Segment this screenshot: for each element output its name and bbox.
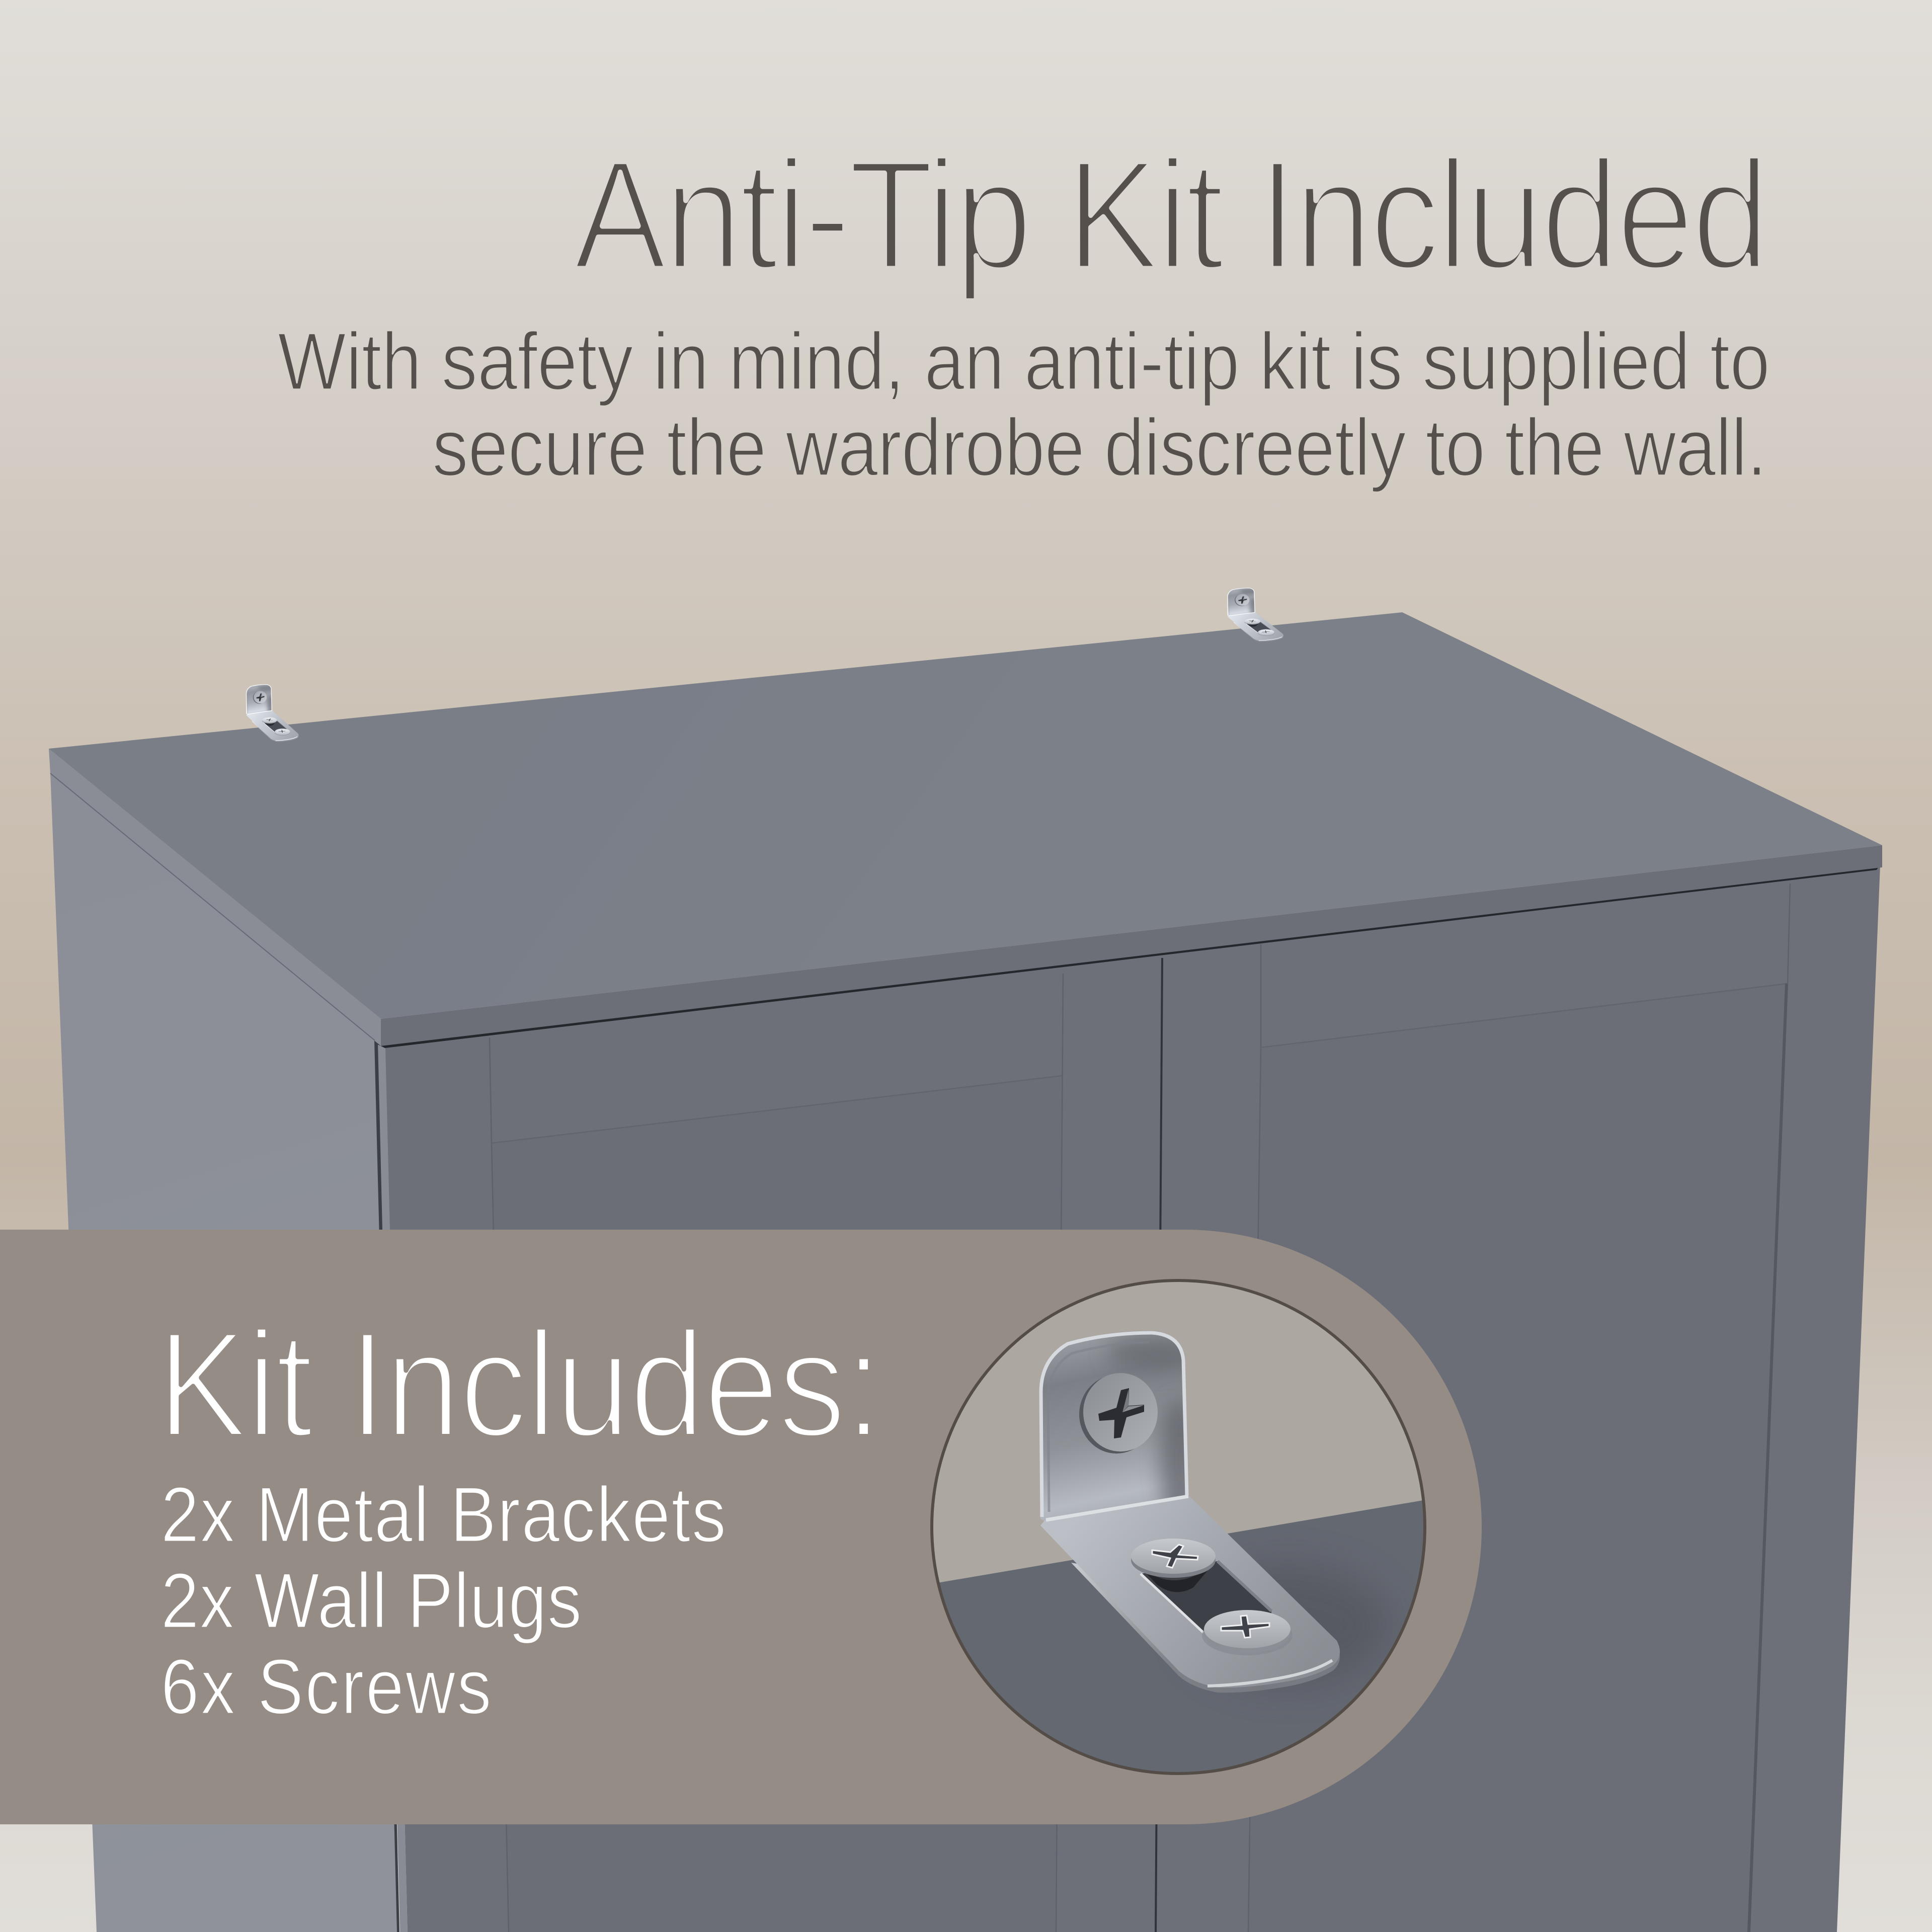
heading: kit includes: Kit Includes: [157, 1301, 882, 1469]
top surface [49, 612, 1882, 1019]
right small bracket [1227, 588, 1283, 641]
title: Anti-Tip Kit Included [573, 128, 1769, 303]
dark gap between side and door [374, 1040, 399, 1932]
description text: With safety in mind, an anti-tip kit is supplied to [278, 316, 1770, 407]
gap under worktop [376, 865, 1880, 1048]
right door panel recess [1248, 883, 1790, 1932]
side door edge strip [377, 1040, 408, 1932]
description text: secure the wardrobe discreetly to the wall. [432, 402, 1767, 493]
panel: kit includes [0, 1230, 1482, 1824]
wardrobe illustration [49, 612, 1882, 1932]
door centre gap [1156, 958, 1162, 1932]
left door panel recess [490, 974, 1063, 1932]
description text [278, 316, 1770, 493]
wardrobe door front [385, 865, 1880, 1932]
kit item list: 6x Screws [160, 1643, 492, 1731]
left small bracket [246, 684, 299, 742]
kit item list: 2x Metal Brackets [160, 1471, 726, 1559]
kit item list [160, 1471, 726, 1731]
top front edge [381, 845, 1882, 1046]
kit item list: 2x Wall Plugs [160, 1557, 582, 1645]
wardrobe side panel [50, 773, 397, 1932]
top left edge strip [49, 749, 381, 1046]
circular bracket close-up [926, 1278, 1429, 1781]
